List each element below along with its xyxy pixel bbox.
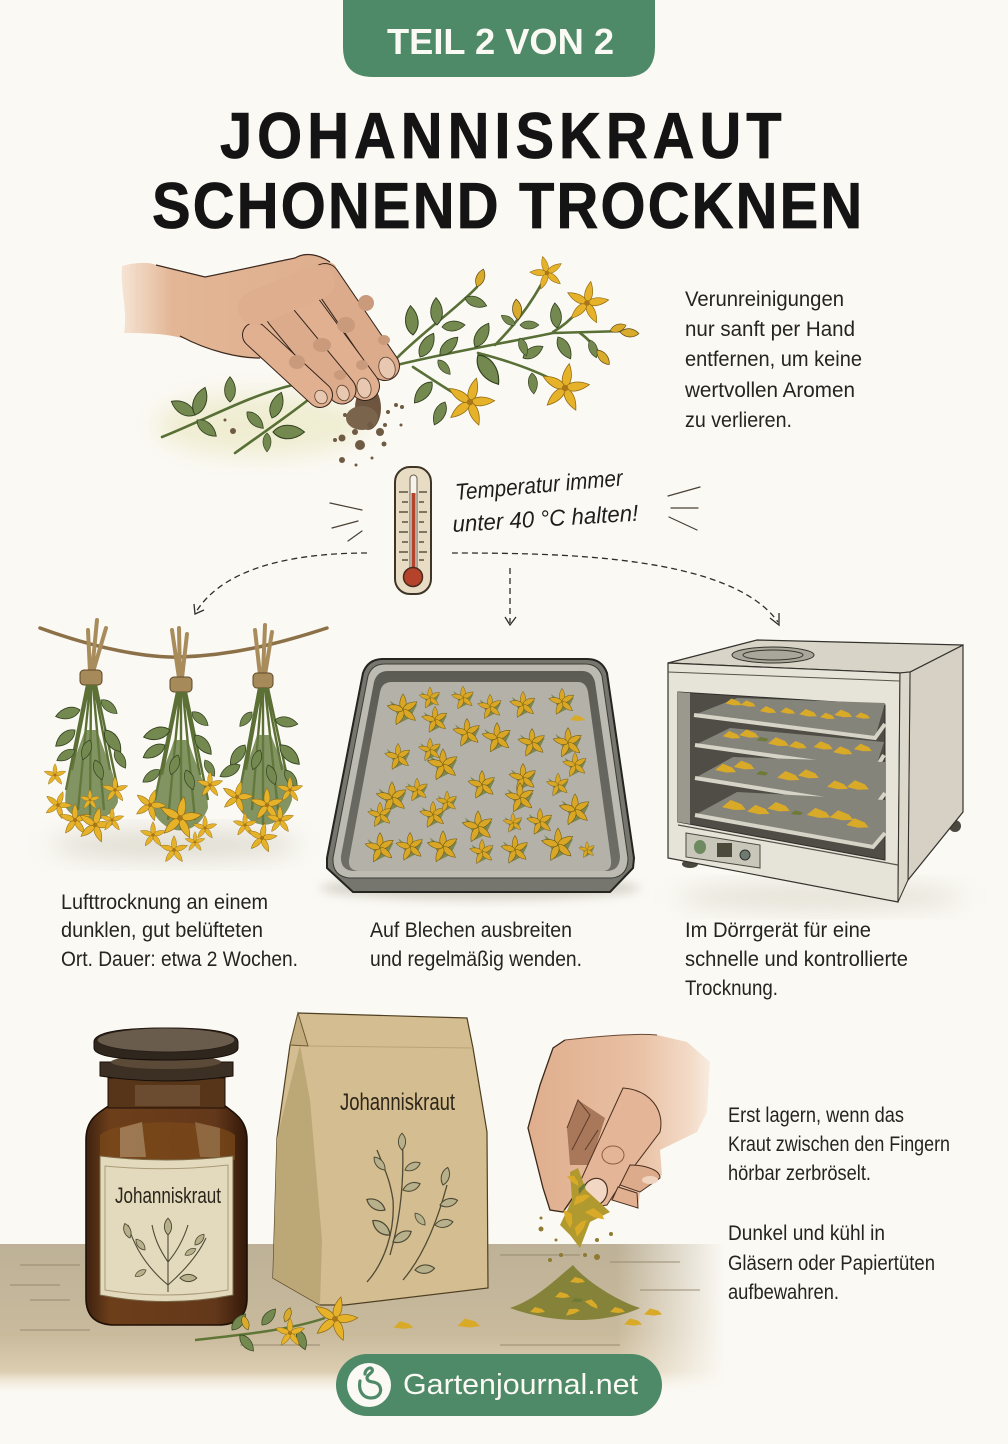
dashed arrow left xyxy=(194,553,367,614)
text: dehydrator: schnelle und kontrollierte xyxy=(685,948,908,971)
herb pile xyxy=(510,1265,662,1326)
hand xyxy=(122,255,398,406)
footer badge: Gartenjournal.net xyxy=(403,1369,638,1401)
dehydrator tray 4 xyxy=(695,792,885,847)
text: remove impurities xyxy=(684,288,862,432)
text: remove impurities: zu verlieren. xyxy=(685,409,792,432)
bag plant drawing xyxy=(365,1133,459,1282)
dehydrator tray 2 xyxy=(695,727,884,770)
text: storage xyxy=(728,1104,950,1304)
wooden table xyxy=(0,1244,725,1394)
text: baking sheets: Auf Blechen ausbreiten xyxy=(370,919,572,942)
dehydrator tray 3 xyxy=(695,757,885,807)
text: remove impurities: nur sanft per Hand xyxy=(685,318,855,341)
bunch 1 xyxy=(40,620,129,846)
illustration: paper bag: Johanniskraut xyxy=(340,1089,455,1116)
text: baking sheets: und regelmäßig wenden. xyxy=(370,948,582,971)
illustration: baking tray with herbs xyxy=(320,659,640,900)
title xyxy=(152,100,862,243)
text: storage: Erst lagern, wenn das xyxy=(728,1104,904,1127)
handwritten note: unter 40 °C halten! xyxy=(452,500,640,537)
bunch 2 xyxy=(130,628,223,863)
title: SCHONEND TROCKNEN xyxy=(152,170,862,243)
text: remove impurities: entfernen, um keine xyxy=(685,348,862,371)
text: remove impurities: wertvollen Aromen xyxy=(684,379,855,402)
text: dehydrator xyxy=(685,919,908,1000)
thumb xyxy=(580,1088,661,1208)
text: storage: Dunkel und kühl in xyxy=(728,1222,885,1245)
handwritten note xyxy=(452,464,640,537)
text: baking sheets xyxy=(370,919,582,971)
dashed arrow right xyxy=(452,553,779,625)
text: dehydrator: Im Dörrgerät für eine xyxy=(685,919,871,942)
herb sprig on table xyxy=(195,1291,480,1354)
text: air drying xyxy=(61,891,298,971)
text: remove impurities: Verunreinigungen xyxy=(685,288,844,311)
footer badge xyxy=(336,1354,662,1416)
text: air drying: Lufttrocknung an einem xyxy=(61,891,268,914)
falling crumbs xyxy=(538,1168,613,1262)
rays left of thermometer xyxy=(330,503,362,541)
herb sprig xyxy=(162,252,639,453)
dried flowers on tray xyxy=(364,686,595,865)
title: JOHANNISKRAUT xyxy=(220,100,782,173)
text: storage: aufbewahren. xyxy=(728,1281,839,1304)
control panel xyxy=(686,833,760,868)
text: dehydrator: Trocknung. xyxy=(685,977,778,1000)
soil crumbs xyxy=(224,386,404,466)
text: storage: Gläsern oder Papiertüten xyxy=(728,1252,935,1275)
jar label: Johanniskraut xyxy=(115,1183,221,1208)
header tab: part 2 of 2: TEIL 2 VON 2 xyxy=(387,21,614,62)
bunch 3 xyxy=(217,625,303,854)
text: air drying: dunklen, gut belüfteten xyxy=(61,919,263,942)
illustration: food dehydrator xyxy=(668,640,965,911)
text: storage: hörbar zerbröselt. xyxy=(728,1162,871,1185)
illustration: hand cleaning herb sprig xyxy=(122,252,639,466)
dehydrator tray 1 xyxy=(694,698,885,738)
illustration: paper bag xyxy=(273,1013,488,1305)
illustration: amber jar xyxy=(86,1028,247,1325)
icon: thermometer xyxy=(395,467,431,594)
dashed arrow middle xyxy=(505,568,516,625)
jar label xyxy=(100,1156,233,1302)
header tab: part 2 of 2 xyxy=(343,0,655,77)
icon: logo xyxy=(347,1363,391,1407)
text: storage: Kraut zwischen den Fingern xyxy=(728,1133,950,1156)
rays right of note xyxy=(668,487,700,530)
illustration: hanging herb bunches xyxy=(40,620,327,863)
text: air drying: Ort. Dauer: etwa 2 Wochen. xyxy=(61,948,298,971)
illustration: hand crumbling dried herb xyxy=(510,1034,710,1326)
handwritten note: Temperatur immer xyxy=(454,464,625,505)
